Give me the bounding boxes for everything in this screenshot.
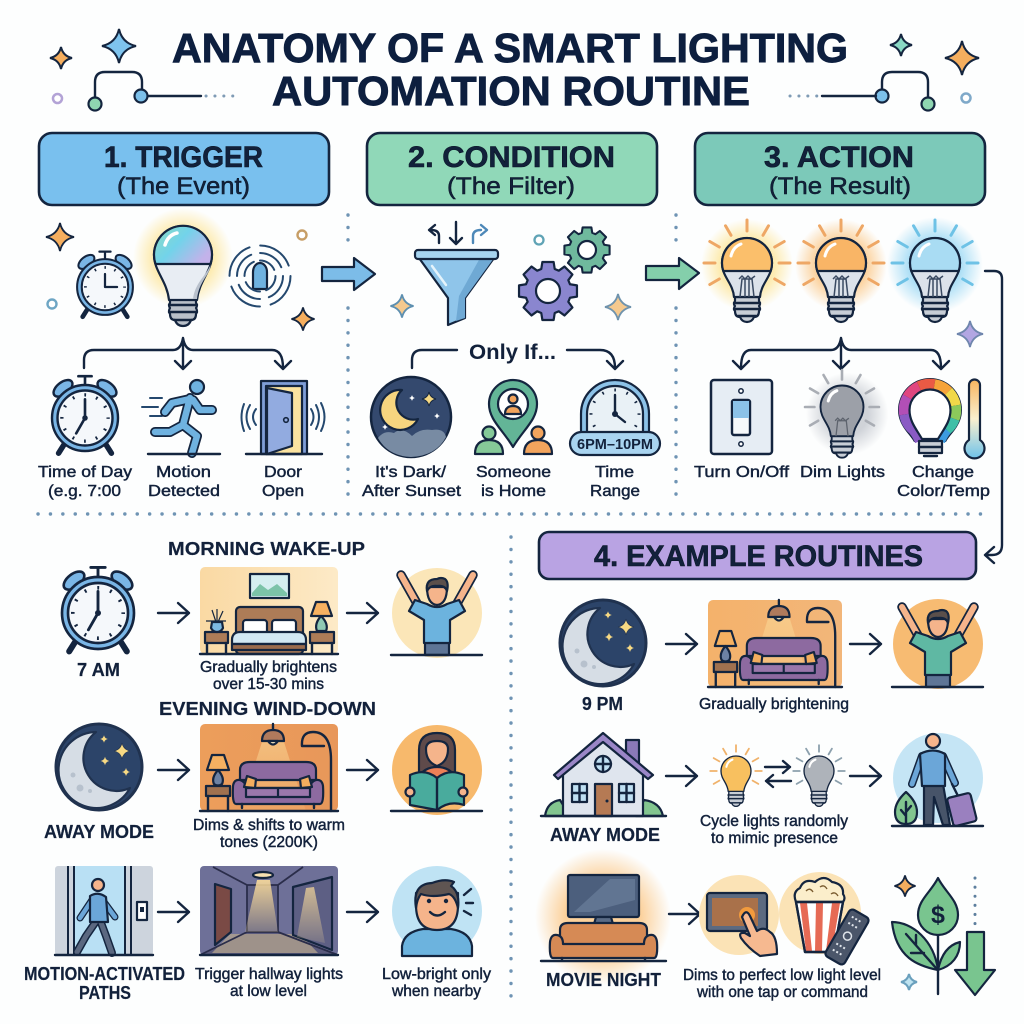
icon: traveller with suitcase (892, 733, 983, 826)
title: ANATOMY OF A SMART LIGHTING (172, 25, 848, 71)
dotted dividers (38, 215, 985, 1000)
heading: action: 3. ACTION (764, 141, 914, 174)
caption: to mimic presence (711, 830, 838, 847)
icon: rgb smart bulb (133, 208, 233, 326)
label: someone is home: is Home (481, 483, 546, 500)
label: after sunset (362, 464, 462, 500)
title (172, 25, 848, 114)
header decoration right (790, 34, 979, 110)
label: change color temp: Color/Temp (897, 483, 990, 500)
panel: left routines (24, 539, 491, 1003)
arrow (158, 760, 189, 780)
icon: person reading (391, 725, 482, 815)
heading: morning wake-up: MORNING WAKE-UP (168, 539, 365, 559)
heading: example routines (539, 532, 976, 579)
icon: smiling person (392, 866, 482, 956)
label: after sunset: After Sunset (362, 483, 462, 500)
icon: person stretching (892, 599, 983, 689)
text: only if: Only If... (469, 341, 556, 364)
icon: popcorn and remote (779, 872, 870, 966)
label: dim lights: Dim Lights (800, 464, 885, 481)
icon: sparkles (390, 236, 631, 320)
heading: evening wind-down: EVENING WIND-DOWN (159, 699, 376, 719)
label: after sunset: It's Dark/ (375, 464, 447, 481)
label: motion detected (148, 464, 220, 500)
label: time range (590, 464, 640, 500)
icon: dim bulb (805, 370, 888, 458)
caption: Gradually brightens (200, 659, 337, 676)
panel: 2 condition (362, 133, 660, 500)
scene: living room (200, 724, 338, 811)
caption (200, 659, 337, 693)
scene: hallway walker (55, 866, 153, 955)
caption: when nearby (391, 983, 481, 1000)
arrow (850, 766, 881, 786)
icon: wall switch (711, 380, 772, 454)
icon: funnel (415, 222, 498, 325)
caption: at low level (230, 983, 307, 1000)
heading: condition (367, 133, 657, 205)
arrow: condition to action (646, 258, 699, 289)
title: AUTOMATION ROUTINE (272, 68, 750, 114)
label: motion detected: Detected (148, 483, 220, 500)
icon: person stretching (391, 568, 482, 658)
icon: 7 am clock (60, 567, 136, 651)
caption: Dims to perfect low light level (683, 967, 881, 984)
caption: Dims & shifts to warm (193, 817, 345, 834)
icon: sparkles (46, 223, 314, 330)
label: time range: Range (590, 483, 640, 500)
panel: 4 example routines (535, 532, 995, 1001)
arrow (347, 760, 378, 780)
icon: warm bulb (701, 219, 793, 322)
label: time of day: Time of Day (38, 464, 132, 481)
icon: open door (242, 381, 324, 454)
icon: moon (56, 724, 142, 810)
caption (382, 966, 491, 1000)
icon: house (541, 733, 666, 816)
arrow: trigger to condition (322, 258, 375, 290)
arrow (666, 766, 697, 786)
caption: Gradually brightening (699, 696, 849, 713)
scene: lit hallway (200, 866, 338, 955)
caption (193, 817, 345, 851)
arrow connector: trigger options (84, 338, 291, 369)
arrow (158, 603, 189, 623)
caption: Cycle lights randomly (700, 813, 848, 830)
icon: timer with time range (570, 380, 660, 455)
label: time of day: (e.g. 7:00 (48, 483, 121, 500)
icon: alarm clock (76, 252, 134, 317)
icon: tablet tap (699, 875, 779, 956)
caption (700, 813, 848, 847)
arrow connector: action options (733, 338, 949, 369)
heading: trigger (39, 133, 329, 205)
label: someone is home: Someone (476, 464, 551, 481)
icon: timer with time range: 6PM–10PM (577, 436, 653, 453)
heading: trigger: 1. TRIGGER (104, 141, 263, 174)
icon: plant with savings: $ (931, 901, 945, 929)
icon: colour ring bulb (898, 378, 962, 456)
arrow (666, 634, 697, 654)
heading: action: (The Result) (769, 173, 911, 200)
scene: bedroom (200, 567, 338, 654)
label: 7 am: 7 AM (77, 660, 120, 680)
scene: living room bright (708, 600, 842, 687)
icon: moon (560, 600, 646, 686)
icon: motion sensor (230, 246, 290, 306)
icon: cool blue bulb (887, 217, 983, 322)
icon: gears (519, 227, 610, 320)
label: motion-activated paths (24, 964, 185, 1003)
caption: with one tap or command (696, 984, 868, 1001)
label: movie night: MOVIE NIGHT (546, 970, 661, 990)
label: door open (262, 464, 304, 500)
label: motion-activated paths: MOTION-ACTIVATED (24, 964, 185, 984)
arrow (158, 902, 189, 922)
icon: night sky (371, 377, 451, 457)
icon: tv and sofa (535, 849, 671, 985)
label: time of day (38, 464, 132, 500)
arrow connector: action to routines (985, 271, 1002, 563)
label: door open: Door (264, 464, 303, 481)
arrow (347, 902, 378, 922)
heading: condition: (The Filter) (447, 173, 575, 200)
caption (683, 967, 881, 1001)
caption: Trigger hallway lights (195, 966, 343, 983)
caption: over 15-30 mins (213, 676, 324, 693)
heading: action (695, 133, 985, 205)
label: change color temp (897, 464, 990, 500)
arrow (347, 603, 378, 623)
label: time range: Time (595, 464, 634, 481)
text: only if (412, 341, 623, 369)
header decoration left (50, 29, 235, 110)
icon: time of day clock (51, 376, 119, 453)
label: 9 pm: 9 PM (582, 694, 623, 714)
label: motion-activated paths: PATHS (79, 983, 131, 1003)
panel: 1 trigger (38, 133, 329, 500)
caption: Low-bright only (382, 966, 491, 983)
icon: orange bulb (795, 219, 887, 322)
label: turn on off: Turn On/Off (694, 464, 790, 481)
heading: condition: 2. CONDITION (408, 141, 615, 174)
icon: purple sparkle (957, 321, 983, 347)
icon: running person (142, 380, 220, 454)
panel: 3 action (694, 133, 1002, 563)
arrow (669, 904, 700, 924)
arrow (850, 634, 881, 654)
heading: trigger: (The Event) (117, 173, 250, 200)
label: motion detected: Motion (156, 464, 211, 481)
icon: location pin with people (475, 380, 552, 454)
label: someone is home (476, 464, 551, 500)
label: door open: Open (262, 483, 304, 500)
icon: cycling lights (710, 745, 845, 806)
heading: example routines: 4. EXAMPLE ROUTINES (594, 540, 923, 573)
label: away mode: AWAY MODE (44, 822, 154, 842)
icon: plant with savings (892, 876, 995, 995)
caption (195, 966, 343, 1000)
icon: thermometer (964, 380, 984, 458)
label: away mode: AWAY MODE (550, 825, 660, 845)
label: change color temp: Change (912, 464, 974, 481)
caption: tones (2200K) (220, 834, 318, 851)
